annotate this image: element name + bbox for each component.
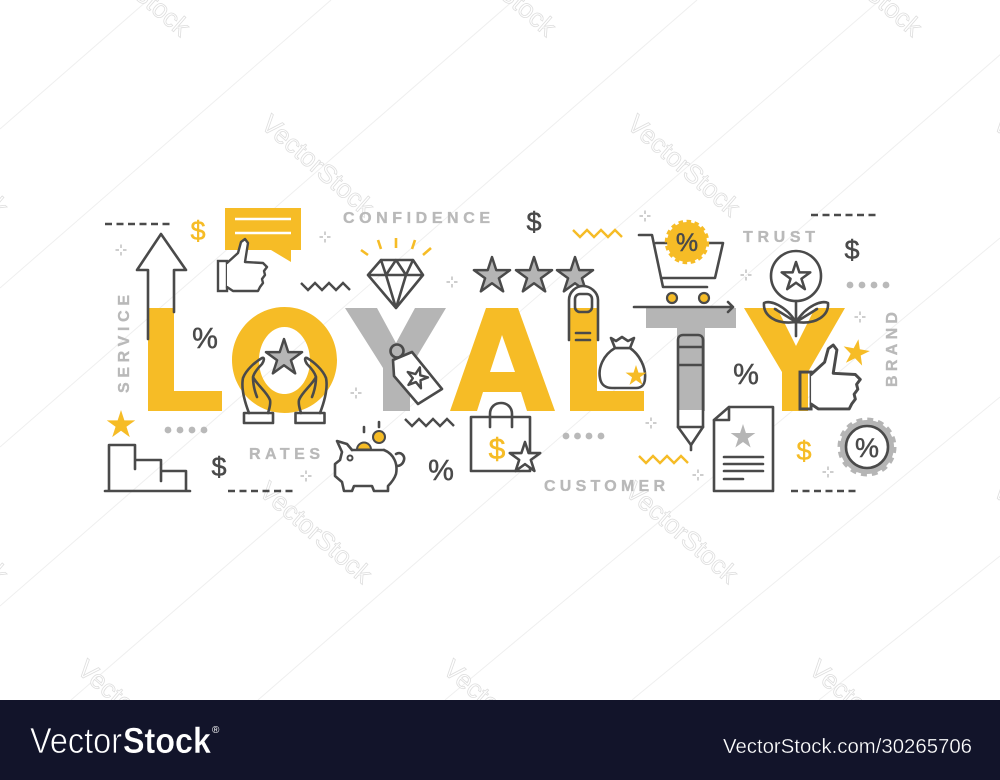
dollar and percent symbols: $ [844, 235, 860, 265]
icon: piggy bank [335, 422, 404, 491]
dollar and percent symbols [190, 207, 860, 487]
footer logo: ® [212, 725, 220, 736]
icon: percent seal: % [855, 433, 879, 463]
label: SERVICE: SERVICE [116, 295, 133, 393]
dollar and percent symbols: $ [190, 216, 206, 246]
letter T [646, 308, 736, 411]
icon: shopping cart with percent badge: % [676, 229, 698, 257]
icon: flower with star [764, 251, 828, 336]
icon: yellow star right [841, 337, 872, 366]
icon: up arrow [137, 234, 186, 339]
letter L second [570, 308, 644, 411]
icon: money bag [600, 337, 646, 388]
icon: document with star [714, 407, 773, 491]
icon: shopping bag [471, 403, 540, 471]
letter O [232, 307, 337, 413]
icon: thumbs up large [800, 345, 860, 409]
dollar and percent symbols: % [733, 359, 759, 391]
icon: hands holding star [242, 339, 327, 423]
footer logo: Vector [30, 720, 122, 761]
word: LOYALTY letters [148, 307, 845, 413]
watermark pattern: VectorStock [254, 475, 379, 590]
footer id: VectorStock.com/30265706 [723, 736, 972, 758]
label: CUSTOMER: CUSTOMER [544, 478, 665, 495]
icon: shopping bag: $ [489, 433, 506, 466]
icon: pencil [678, 335, 703, 450]
arrow over T [634, 302, 733, 312]
watermark pattern: VectorStock [72, 653, 197, 768]
letter A [450, 308, 555, 411]
dollar and percent symbols: % [428, 455, 454, 487]
letter Y yellow [744, 308, 845, 411]
dollar and percent symbols: $ [796, 436, 812, 466]
icon: three stars [474, 257, 593, 291]
icon: diamond with rays [361, 238, 431, 308]
label: BRAND: BRAND [884, 312, 901, 387]
icon: yellow star left [107, 410, 135, 437]
dollar and percent symbols: % [192, 323, 218, 355]
icon: speech bubble [225, 208, 301, 262]
icon: shopping cart with percent badge [639, 222, 723, 303]
label: CONFIDENCE: CONFIDENCE [343, 210, 490, 227]
letter L [148, 308, 222, 411]
label: TRUST: TRUST [743, 229, 815, 246]
footer logo: Stock [123, 720, 212, 761]
letter Y grey [345, 308, 446, 411]
icon: price tag [390, 344, 442, 404]
icon: stairs [105, 445, 190, 491]
decorative small marks: dashes, sparkles, dots, zigzags [105, 210, 889, 491]
dollar and percent symbols: $ [526, 207, 542, 237]
dollar and percent symbols: $ [211, 452, 227, 482]
icon: finger [569, 286, 598, 340]
watermark pattern: VectorStock [256, 108, 381, 223]
footer bar [0, 700, 1000, 780]
watermark pattern: VectorStock [622, 108, 747, 223]
icon: thumbs up small [218, 239, 267, 291]
watermark pattern: VectorStock [438, 653, 563, 768]
watermark pattern: VectorStock [620, 475, 745, 590]
footer logo [30, 720, 220, 761]
label: RATES: RATES [249, 446, 320, 463]
icon: percent seal [839, 419, 895, 475]
watermark pattern: VectorStock [804, 653, 929, 768]
